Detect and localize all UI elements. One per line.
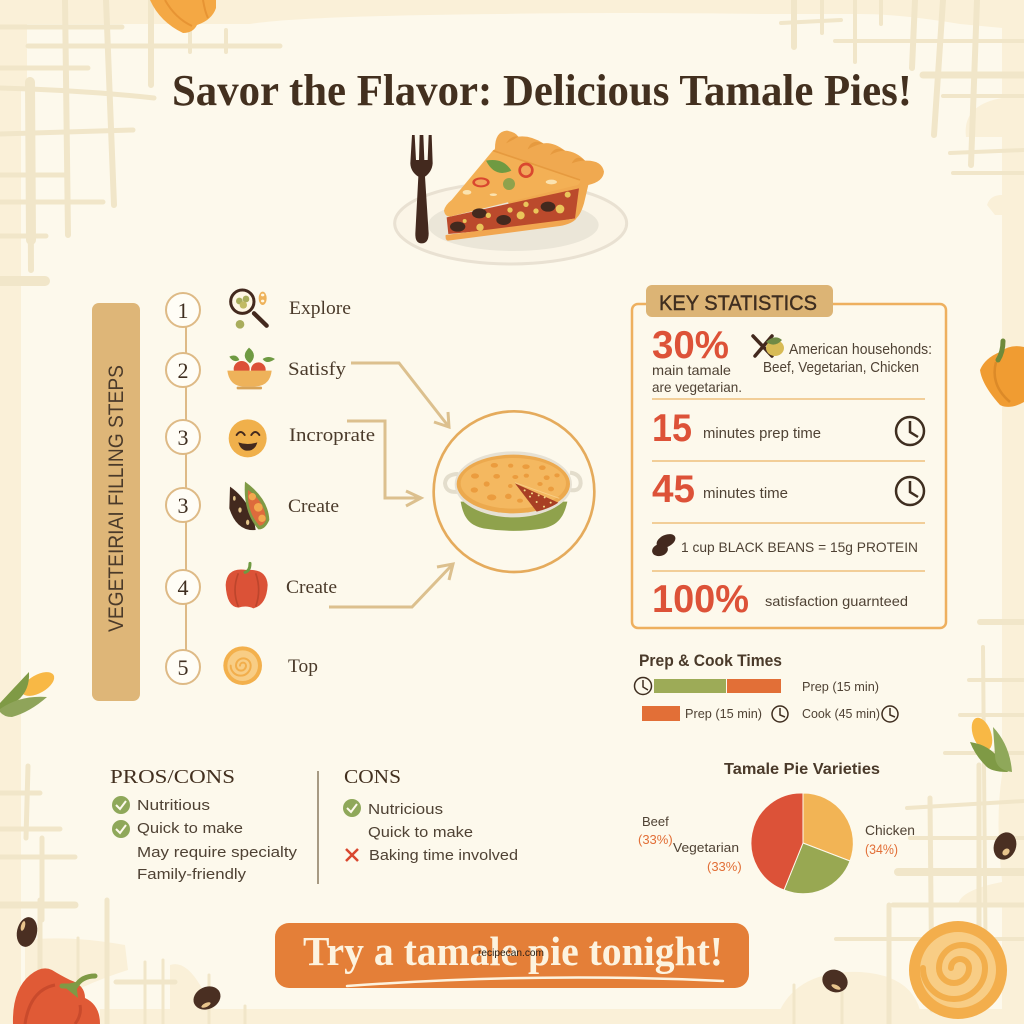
step 5 Top: Top (288, 656, 318, 677)
step 5 Top (166, 650, 318, 684)
icon: bean pods (229, 482, 269, 530)
panel: cons list: Nutricious (368, 801, 443, 818)
icon: red bell pepper (226, 563, 268, 608)
step 1 Explore: 1 (178, 298, 188, 323)
call to action button: Try a tamale pie tonight! (303, 928, 723, 974)
chart: prep and cook times: Prep (15 min) (685, 706, 762, 721)
decoration: red pepper bottom left (13, 968, 100, 1024)
arrow: Satisfy to dish (351, 363, 449, 427)
step 4 Create (166, 570, 337, 604)
label: beef (638, 814, 673, 847)
stat: 45 minutes: minutes time (703, 486, 788, 502)
chart: prep and cook times: Cook (45 min) (802, 706, 880, 721)
stat: American households: American househonds: (789, 342, 932, 358)
stat: 30% vegetarian: 30% (652, 324, 729, 367)
panel: numbered steps (166, 293, 375, 684)
pie slice: beef (751, 793, 803, 890)
panel: filling steps title bar: VEGETEIRIAI FILLING STEPS (105, 365, 128, 632)
decoration: corn left (0, 667, 58, 717)
arrow: Incroprate to dish (347, 421, 421, 506)
icon: salad bowl (227, 348, 275, 389)
stat: American households: Beef, Vegetarian, Chicken (763, 360, 919, 376)
pie slice: chicken (803, 793, 853, 861)
stat: black beans protein (651, 531, 918, 558)
decoration: spiral roll bottom right (909, 921, 1007, 1019)
icon: smiling face (229, 419, 267, 457)
stat: 30% vegetarian: are vegetarian. (652, 379, 742, 395)
step 3 Incroprate: Incroprate (289, 425, 375, 446)
arrow: Create to dish (329, 564, 453, 607)
stat: 45 minutes (652, 468, 924, 511)
step 4 Create: Create (286, 577, 337, 598)
stat: American households (763, 342, 932, 376)
panel: key statistics (632, 285, 946, 628)
stat: 100% satisfaction: satisfaction guarnteed (765, 593, 908, 609)
illustration: pie slice on plate with fork (395, 131, 627, 264)
step 1 Explore (166, 293, 351, 327)
step 4 Create: 4 (178, 575, 188, 600)
step 3 Incroprate (166, 420, 375, 454)
pie slice: vegetarian (784, 843, 850, 894)
panel: cons list: Quick to make (368, 824, 473, 841)
step 2 Satisfy: Satisfy (288, 359, 347, 380)
step 2 Satisfy (166, 353, 347, 387)
title: Savor the Flavor: Delicious Tamale Pies! (172, 66, 912, 115)
panel: pros list: May require specialty (137, 844, 298, 861)
label: vegetarian (673, 840, 742, 874)
step 1 Explore: Explore (289, 298, 351, 319)
stat: 15 minutes prep: 15 (652, 407, 692, 450)
label: vegetarian: Vegetarian (673, 840, 739, 855)
icon: crossed fork and knife with corn (753, 336, 784, 356)
panel: cons list: CONS (344, 766, 401, 788)
decoration: corn right (968, 715, 1012, 772)
icon: spiral roll (223, 646, 262, 685)
step 5 Top: 5 (178, 655, 188, 680)
key statistics heading: KEY STATISTICS (659, 292, 817, 315)
panel: pros list (110, 766, 298, 883)
panel: filling steps title bar (92, 303, 140, 701)
panel: cons list: Baking time involved (369, 847, 518, 864)
panel: pros list: Nutritious (137, 797, 210, 814)
stat: 100% satisfaction: 100% (652, 578, 749, 621)
step 3 Create: Create (288, 496, 339, 517)
chart: prep and cook times (634, 652, 898, 722)
step 3 Create: 3 (178, 493, 188, 518)
stat: black beans protein: 1 cup BLACK BEANS = 15g PROTEIN (681, 539, 918, 555)
label: vegetarian: (33%) (707, 859, 742, 874)
stat: 100% satisfaction (652, 578, 908, 621)
chart: prep and cook times: Prep & Cook Times (639, 652, 782, 670)
illustration: casserole dish in circle (434, 411, 594, 572)
step 2 Satisfy: 2 (178, 358, 188, 383)
icon: magnifying glass (231, 290, 267, 329)
chart: prep and cook times: Prep (15 min) (802, 679, 879, 694)
panel: pros list: PROS/CONS (110, 766, 235, 788)
call to action button (275, 923, 749, 988)
label: beef: (33%) (638, 832, 673, 847)
stat: 15 minutes prep: minutes prep time (703, 426, 821, 442)
decoration: orange pepper top (150, 0, 216, 33)
label: chicken: (34%) (865, 841, 898, 857)
label: chicken (865, 822, 915, 857)
stat: 30% vegetarian: main tamale (652, 362, 731, 378)
step 3 Create (166, 488, 339, 522)
decoration: black beans (14, 829, 1020, 1014)
stat: 45 minutes: 45 (652, 468, 695, 511)
panel: cons list (343, 766, 518, 864)
stat: 15 minutes prep (652, 407, 924, 450)
panel: pros list: Quick to make (137, 820, 243, 837)
label: beef: Beef (642, 814, 669, 829)
chart: tamale pie varieties (638, 761, 915, 894)
key statistics heading (646, 285, 833, 317)
decoration: orange pepper right (980, 341, 1024, 407)
panel: pros list: Family-friendly (137, 866, 247, 883)
label: chicken: Chicken (865, 822, 915, 838)
step 3 Incroprate: 3 (178, 425, 188, 450)
stat: 30% vegetarian (652, 324, 742, 395)
chart: tamale pie varieties: Tamale Pie Varieties (724, 761, 880, 778)
call to action button: recipecan.com (478, 947, 544, 959)
